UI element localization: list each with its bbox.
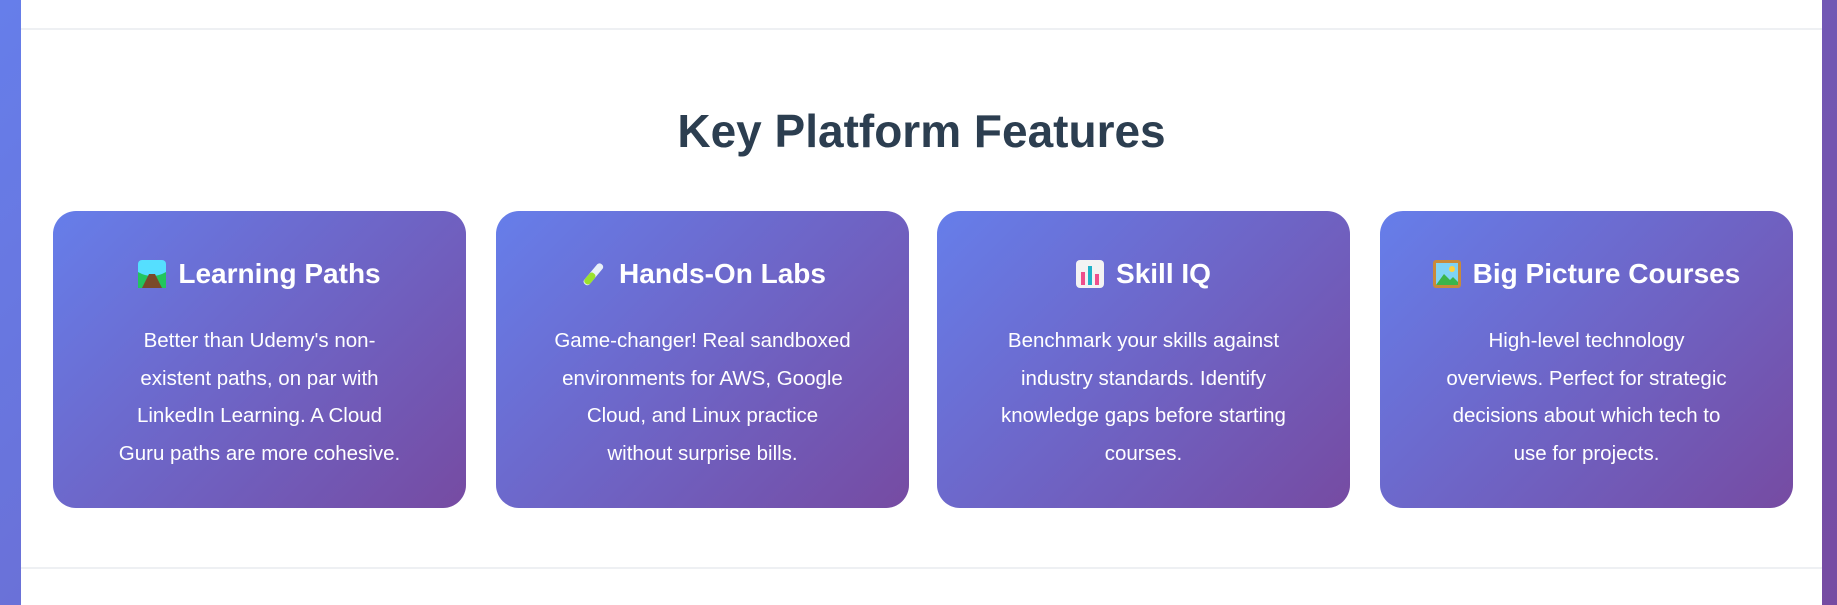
card text (119, 329, 400, 464)
card text: Benchmark your skills against (1008, 329, 1279, 352)
card text: courses. (1105, 442, 1182, 464)
card heading: labs: Hands-On Labs (619, 258, 826, 289)
card text: LinkedIn Learning. A Cloud (137, 404, 382, 427)
card text: decisions about which tech to (1453, 404, 1720, 427)
card text: industry standards. Identify (1021, 366, 1266, 390)
card: hands-on labs (496, 211, 909, 508)
card text: High-level technology (1488, 329, 1684, 352)
card text: existent paths, on par with (140, 366, 379, 390)
card text: Guru paths are more cohesive. (119, 442, 400, 464)
card text: Cloud, and Linux practice (587, 404, 818, 427)
card text (554, 329, 851, 464)
card text: knowledge gaps before starting (1001, 404, 1286, 427)
card text: Game-changer! Real sandboxed (554, 329, 851, 352)
card text: environments for AWS, Google (562, 366, 843, 390)
card: big picture courses (1380, 211, 1793, 508)
title: Key Platform Features (677, 105, 1166, 157)
card heading: learning paths: Learning Paths (178, 258, 381, 289)
card text: overviews. Perfect for strategic (1446, 366, 1727, 390)
card text: Better than Udemy's non- (144, 329, 375, 352)
card text (1001, 329, 1286, 464)
card heading: big picture: Big Picture Courses (1473, 258, 1740, 289)
card: skill iq (937, 211, 1350, 508)
card text (1446, 329, 1727, 464)
card text: use for projects. (1514, 442, 1659, 464)
card: learning paths (53, 211, 466, 508)
card text: without surprise bills. (607, 442, 798, 464)
card heading: skill iq: Skill IQ (1116, 258, 1211, 289)
